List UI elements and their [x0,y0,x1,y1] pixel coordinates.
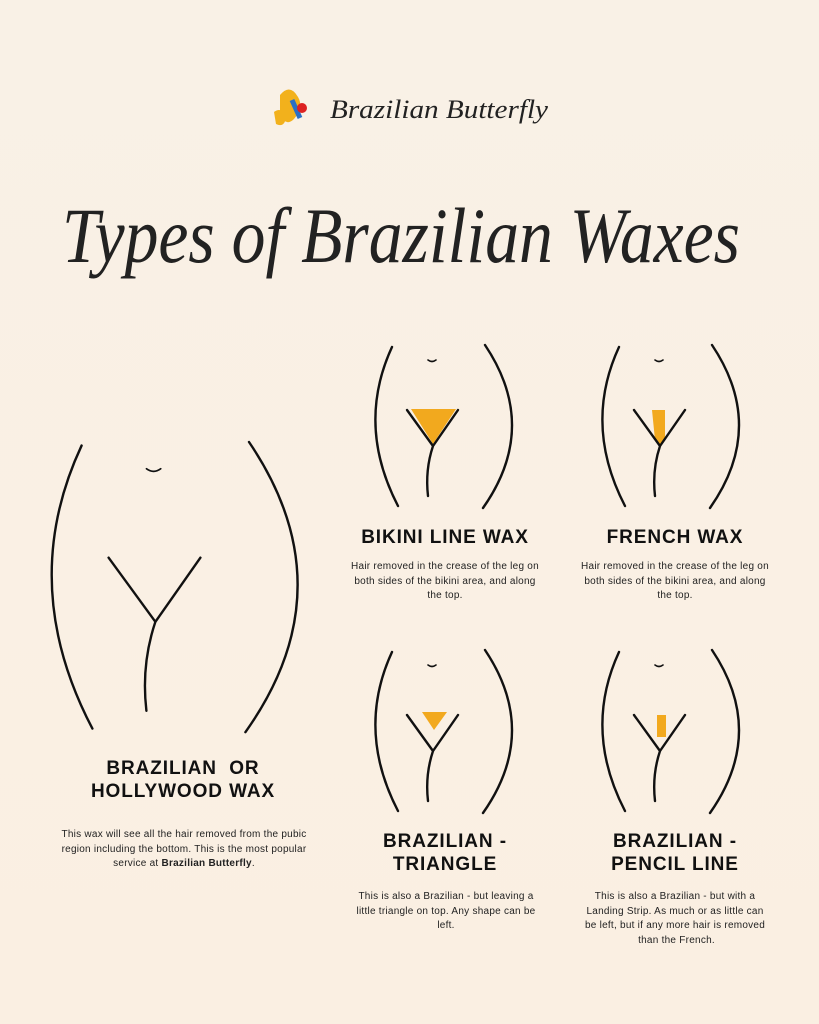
text: bikini: Hair removed in the crease of the leg on both sides of the bikini area, and along the top. [351,561,539,601]
figure: french [602,345,739,508]
heading: brazilian: BRAZILIAN OR HOLLYWOOD WAX [91,758,275,802]
heading: pencil line: BRAZILIAN - [613,831,737,852]
heading: pencil line: PENCIL LINE [611,854,739,875]
logo: Brazilian Butterfly [330,95,549,124]
heading: bikini line: BIKINI LINE WAX [361,527,529,548]
heading: french: FRENCH WAX [607,527,743,548]
figure: brazilian triangle [375,650,512,813]
text: triangle: This is also a Brazilian - but leaving a little triangle on top. Any shape can be left. [356,891,536,931]
heading: triangle: BRAZILIAN - [383,831,507,852]
text: brazilian: This wax will see all the hair removed from the pubic region including the bottom. This is the most popular service at Brazilian Butterfly. [61,829,306,869]
text: french: Hair removed in the crease of the leg on both sides of the bikini area, and along the top. [581,561,769,601]
heading: pencil line [611,831,739,875]
heading: triangle: TRIANGLE [393,854,497,875]
text: pencil: This is also a Brazilian - but with a Landing Strip. As much or as little can be left, but if any more hair is removed than the French. [585,891,765,946]
figure: bikini line [375,345,512,508]
figure: brazilian/hollywood [52,442,298,732]
heading: triangle [383,831,507,875]
figure: pencil line [602,650,739,813]
logo [274,89,549,125]
